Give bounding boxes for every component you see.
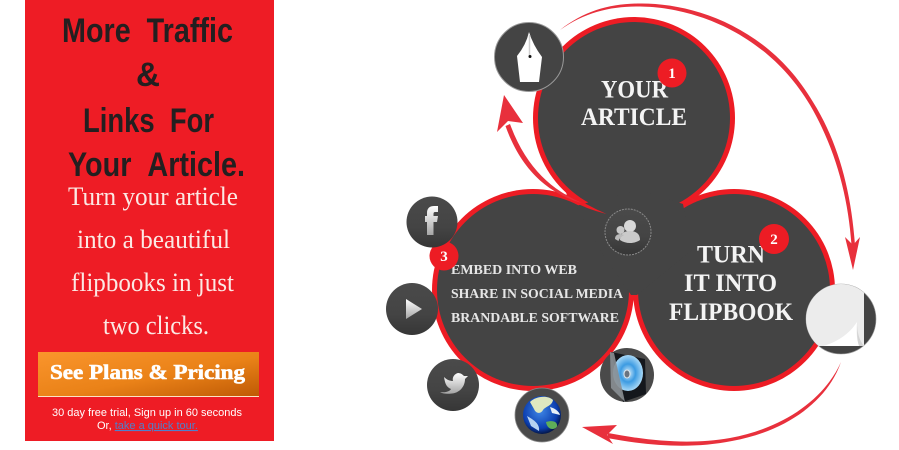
step 3 text: SHARE IN SOCIAL MEDIA: [451, 287, 624, 302]
icon: facebook: [406, 196, 458, 248]
badge 3: [430, 242, 458, 270]
icon: play: [386, 283, 438, 335]
button: see plans and pricing: See Plans & Pricing: [50, 360, 246, 384]
free trial note: 30 day free trial, Sign up in 60 seconds: [52, 407, 242, 419]
step 3 text: BRANDABLE SOFTWARE: [451, 311, 619, 326]
icon: twitter bird: [427, 359, 479, 411]
step 2 text: FLIPBOOK: [669, 299, 794, 326]
title: More Traffic: [62, 12, 233, 50]
step 1 text: [581, 76, 687, 131]
description text: [68, 182, 238, 340]
badge 2: 2: [770, 232, 778, 248]
step 2 text: TURN: [697, 242, 765, 268]
icon: page curl flipbook: [806, 284, 876, 354]
description text: flipbooks in just: [71, 268, 235, 297]
badge 2: [759, 224, 789, 254]
free trial note: [52, 407, 242, 432]
arrow: flipbook to web: [582, 362, 841, 446]
button: see plans and pricing: [38, 352, 259, 397]
step 2 text: [669, 242, 794, 326]
badge 3: 3: [440, 249, 448, 265]
badge 1: 1: [668, 66, 676, 82]
step 1 text: YOUR: [601, 76, 669, 104]
step 3 text: EMBED INTO WEB: [451, 263, 577, 278]
arrow: social back to article: [497, 95, 582, 203]
description text: into a beautiful: [77, 225, 230, 254]
panel: call to action: [25, 0, 274, 441]
icon: people group: [605, 209, 651, 255]
arrow: article to flipbook: [560, 3, 860, 270]
title: [62, 12, 245, 184]
icon: software cd case: [600, 348, 654, 402]
title: &: [136, 56, 160, 94]
step 1 text: ARTICLE: [581, 104, 687, 131]
icon: globe: [515, 388, 569, 442]
step 2 text: IT INTO: [684, 270, 777, 297]
description text: two clicks.: [103, 311, 209, 340]
badge 1: [658, 58, 686, 88]
free trial note: Or, take a quick tour.: [97, 420, 198, 432]
step 3 text: [451, 263, 624, 326]
three connected circles: [432, 17, 835, 391]
icon: pen nib: [494, 22, 564, 92]
title: Your Article.: [68, 146, 245, 184]
title: Links For: [83, 102, 214, 140]
description text: Turn your article: [68, 182, 238, 211]
